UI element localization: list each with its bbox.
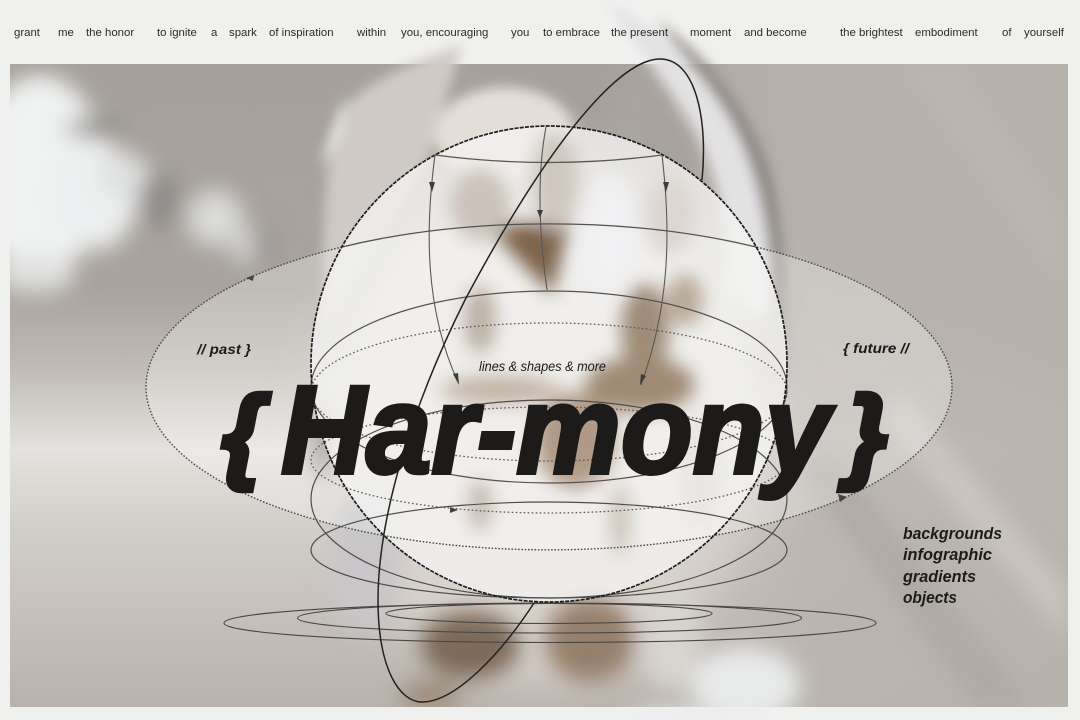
title: Har-mony: Har-mony bbox=[281, 361, 835, 500]
ellipse: dotted upper ring bbox=[311, 323, 787, 461]
ellipse: outer base ring bbox=[224, 604, 876, 642]
ellipse: large solid ring bbox=[311, 400, 787, 598]
arrow: right descending line bbox=[640, 155, 669, 385]
bottom margin cloud bbox=[630, 708, 770, 720]
orbit: tilted black ellipse bbox=[378, 59, 703, 702]
top tagline: grant bbox=[14, 27, 41, 39]
solid upper arc of outer ellipse bbox=[342, 224, 756, 247]
label: past: // past } bbox=[196, 341, 252, 357]
top tagline: the honor bbox=[86, 27, 134, 39]
top tagline: you bbox=[511, 27, 529, 39]
top tagline: and become bbox=[744, 27, 807, 39]
top tagline: of bbox=[1002, 27, 1012, 39]
top tagline: to ignite bbox=[157, 27, 197, 39]
statue detail seen through lens bbox=[440, 130, 703, 556]
ellipse: inner base ring bbox=[386, 604, 712, 624]
ellipse: flat solid ring bbox=[311, 502, 787, 598]
ellipse: middle base ring bbox=[298, 603, 802, 633]
arrows: converging lines from top of lens bbox=[429, 127, 669, 385]
arrow: middle descending line bbox=[537, 127, 547, 290]
list: backgrounds infographic gradients objects: gradients bbox=[902, 567, 976, 586]
top tagline: you, encouraging bbox=[401, 27, 488, 39]
top tagline: of inspiration bbox=[269, 27, 334, 39]
top tagline bbox=[14, 27, 1065, 39]
big ellipse fill: timeline orbit bbox=[146, 224, 952, 550]
top tagline: a bbox=[211, 27, 218, 39]
label: future: { future // bbox=[843, 340, 911, 356]
outer ellipse dotted outline bbox=[146, 247, 952, 550]
ellipses inside lens bbox=[224, 224, 876, 642]
top tagline: me bbox=[58, 27, 74, 39]
circle: central lens bbox=[311, 126, 787, 602]
title: Har-mony: { bbox=[222, 376, 270, 492]
list: backgrounds infographic gradients objects: objects bbox=[903, 588, 957, 607]
top tagline: to embrace bbox=[543, 27, 600, 39]
title: Har-mony: } bbox=[839, 376, 887, 492]
top tagline: spark bbox=[229, 27, 257, 39]
top tagline: yourself bbox=[1024, 27, 1065, 39]
arrowheads on orbits bbox=[246, 275, 847, 513]
list: backgrounds infographic gradients objects: infographic bbox=[903, 545, 993, 564]
top tagline: within bbox=[356, 27, 386, 39]
ellipse: dotted lower ring bbox=[311, 407, 787, 513]
top tagline: the present bbox=[611, 27, 669, 39]
ellipse: solid mid ring bbox=[311, 291, 787, 483]
label: lines and shapes: lines & shapes & more bbox=[479, 358, 606, 374]
list: backgrounds infographic gradients objects bbox=[902, 524, 1002, 607]
circle dashed outline bbox=[311, 126, 787, 602]
list: backgrounds infographic gradients objects: backgrounds bbox=[903, 524, 1002, 543]
top tagline: embodiment bbox=[915, 27, 979, 39]
top tagline: the brightest bbox=[840, 27, 904, 39]
arrow: left descending line bbox=[429, 155, 459, 385]
top tagline: moment bbox=[690, 27, 732, 39]
